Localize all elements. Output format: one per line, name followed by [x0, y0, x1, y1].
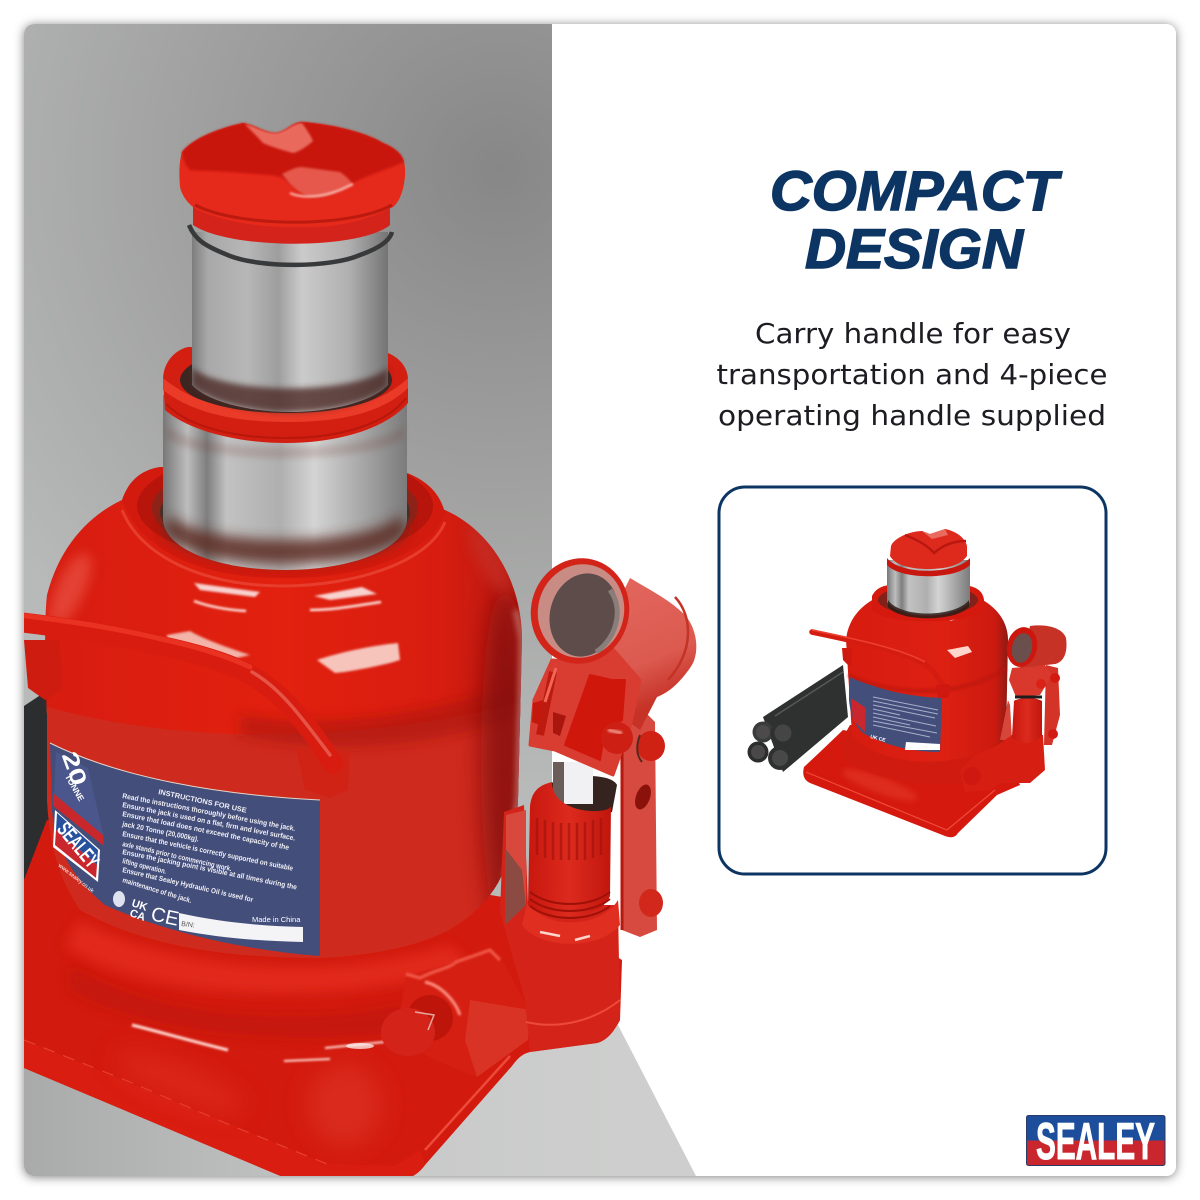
instructions text: INSTRUCTIONS FOR USE	[158, 787, 248, 815]
jack main body	[40, 500, 530, 970]
stored handle tube behind jack	[24, 694, 50, 882]
certification marks: CE	[149, 903, 181, 931]
inset: collar	[872, 585, 984, 621]
inset: carry handle	[812, 630, 950, 698]
capacity badge: www.sealey.co.uk	[56, 862, 95, 894]
jack base plate	[24, 820, 622, 1180]
pump head socket	[520, 548, 696, 775]
batch number box: B/N:	[181, 921, 195, 929]
inset: ram	[887, 560, 970, 618]
certification marks	[113, 891, 179, 926]
instructions text: Ensure that Sealey Hydraulic Oil is used for	[122, 865, 254, 904]
instructions text: Ensure that the vehicle is correctly supported on suitable	[122, 829, 294, 873]
jack body skirt	[24, 820, 500, 1061]
certification marks: UK	[130, 897, 149, 914]
description text: transportation and 4-piece	[716, 358, 1108, 391]
floor wedge	[24, 1025, 696, 1176]
capacity badge: SEALEY	[52, 818, 103, 873]
description text: Carry handle for easy	[755, 317, 1071, 350]
pump threaded cylinder	[528, 782, 611, 918]
instructions text	[121, 787, 298, 905]
jack neck collar	[120, 467, 446, 588]
jack saddle cap	[179, 122, 405, 227]
instructions text: lifting operation.	[122, 856, 167, 876]
title: Compact Design	[770, 159, 1063, 280]
instructions text: maintenance of the jack.	[121, 875, 193, 905]
inset: body skirt	[841, 725, 1010, 784]
inset: label: UK CE	[870, 734, 887, 744]
instructions text: Read the instructions thoroughly before using the jack.	[122, 791, 296, 833]
dome highlights	[317, 643, 400, 673]
lower ram cylinder	[163, 395, 407, 570]
instructions text: Ensure that load does not exceed the capacity of the	[122, 809, 290, 852]
O-ring on ram	[189, 225, 392, 265]
batch number box: Made in China	[252, 915, 301, 924]
instructions text: Ensure the jacking point is visible at all times during the	[122, 847, 298, 891]
instructions text: jack 20 Tonne (20,000kg).	[121, 819, 200, 844]
inset: saddle cap	[887, 529, 970, 576]
pump chrome piston	[552, 762, 617, 812]
photo panel: grey backdrop and main jack close-up	[18, 24, 696, 1180]
inset: label	[849, 677, 942, 752]
description text: operating handle supplied	[718, 399, 1106, 432]
grey backdrop	[24, 24, 552, 901]
inset: body	[846, 596, 1008, 762]
pump link arm	[620, 707, 665, 937]
pump housing	[500, 805, 620, 1052]
capacity badge: TONNE	[63, 772, 87, 803]
batch number box	[179, 913, 303, 942]
instructions text: axle stands prior to commencing work.	[122, 839, 233, 873]
lower matte section	[40, 700, 530, 970]
red ring on lower ram	[163, 346, 408, 443]
title: Compact Design: DESIGN	[805, 217, 1025, 280]
release valve boss	[381, 950, 530, 1077]
title: Compact Design: COMPACT	[770, 159, 1063, 222]
capacity badge: 20	[57, 748, 92, 789]
upper ram cylinder	[192, 232, 388, 412]
carry handle	[18, 615, 350, 798]
inset: pump assembly	[960, 624, 1067, 792]
inset: base plate	[803, 730, 1020, 837]
inset: handle tubes	[748, 665, 848, 772]
inset frame with full jack	[719, 487, 1106, 874]
capacity badge	[52, 748, 104, 894]
certification marks: CA	[128, 907, 147, 924]
instructions text: Ensure the jack is used on a flat, firm and level surface.	[122, 800, 296, 843]
description text	[716, 317, 1108, 432]
red neck below saddle	[193, 205, 390, 244]
instruction label	[50, 743, 320, 956]
